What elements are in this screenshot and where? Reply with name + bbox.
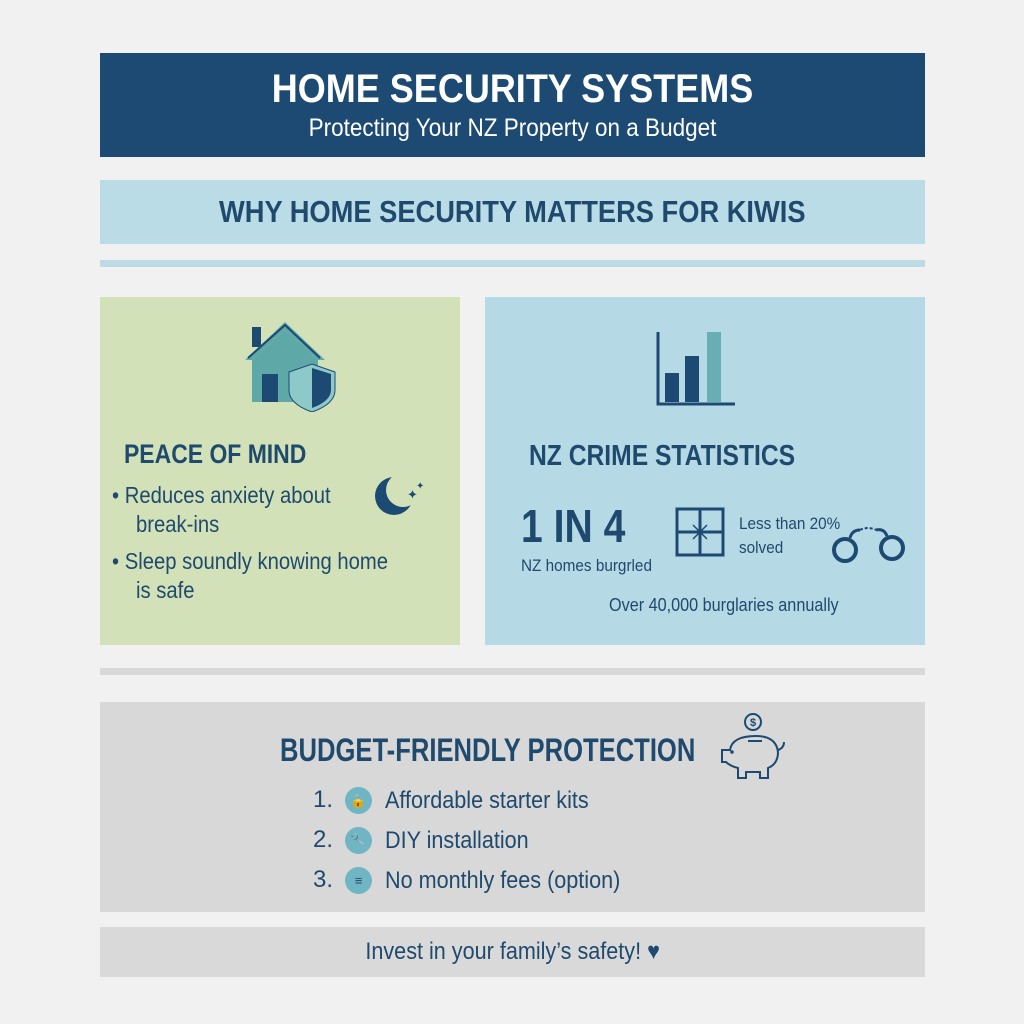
footer callout: Invest in your family’s safety! ♥ [365, 938, 660, 965]
item 1: 🔒 [350, 793, 367, 808]
section heading: WHY HOME SECURITY MATTERS FOR KIWIS [219, 194, 806, 229]
icon: moon: ✦ [416, 481, 424, 492]
stat: 1 in 4: NZ homes burgrled [521, 556, 652, 575]
bullet list: • Reduces anxiety about [112, 482, 331, 508]
icon: piggy bank [721, 713, 785, 779]
stat: 1 in 4: 1 IN 4 [521, 500, 625, 552]
bullet list: is safe [136, 577, 195, 603]
section heading [100, 180, 925, 244]
icon: piggy bank: $ [750, 717, 756, 729]
icon: moon: ✦ [407, 487, 418, 502]
item 2: DIY installation [385, 827, 529, 854]
item 2 [313, 826, 529, 854]
stat: less than 20% solved [739, 514, 840, 557]
subtitle: Protecting Your NZ Property on a Budget [309, 114, 716, 142]
stat: 1 in 4 [521, 500, 652, 575]
heading: nz crime statistics: NZ CRIME STATISTICS [529, 440, 795, 472]
item 3: No monthly fees (option) [385, 867, 621, 894]
heading: budget-friendly protection: BUDGET-FRIENDLY PROTECTION [280, 732, 695, 768]
bullet list: break-ins [136, 511, 219, 537]
icon: broken window [676, 508, 724, 556]
stat: less than 20% solved: solved [739, 538, 783, 557]
bullet list [112, 482, 388, 603]
item 2: 🔧 [350, 832, 367, 848]
numbered list [313, 786, 621, 894]
stat: over 40,000: Over 40,000 burglaries annually [609, 595, 839, 615]
panel: peace of mind [100, 297, 460, 645]
icon: moon [375, 477, 424, 515]
panel: budget-friendly protection [100, 702, 925, 912]
heading: peace of mind: PEACE OF MIND [124, 439, 306, 469]
item 2: 2. [313, 826, 333, 853]
bullet list: • Sleep soundly knowing home [112, 548, 388, 574]
title banner [100, 53, 925, 157]
icon: house with shield [245, 322, 336, 412]
icon: handcuffs [832, 527, 905, 563]
item 1: Affordable starter kits [385, 787, 589, 814]
item 3: 3. [313, 866, 333, 893]
footer callout [100, 927, 925, 977]
icon: bar chart [656, 332, 735, 406]
title: HOME SECURITY SYSTEMS [272, 67, 753, 111]
stat: less than 20% solved: Less than 20% [739, 514, 840, 533]
item 1: 1. [313, 786, 333, 813]
item 3: ≡ [355, 873, 362, 888]
panel: crime statistics [485, 297, 925, 645]
